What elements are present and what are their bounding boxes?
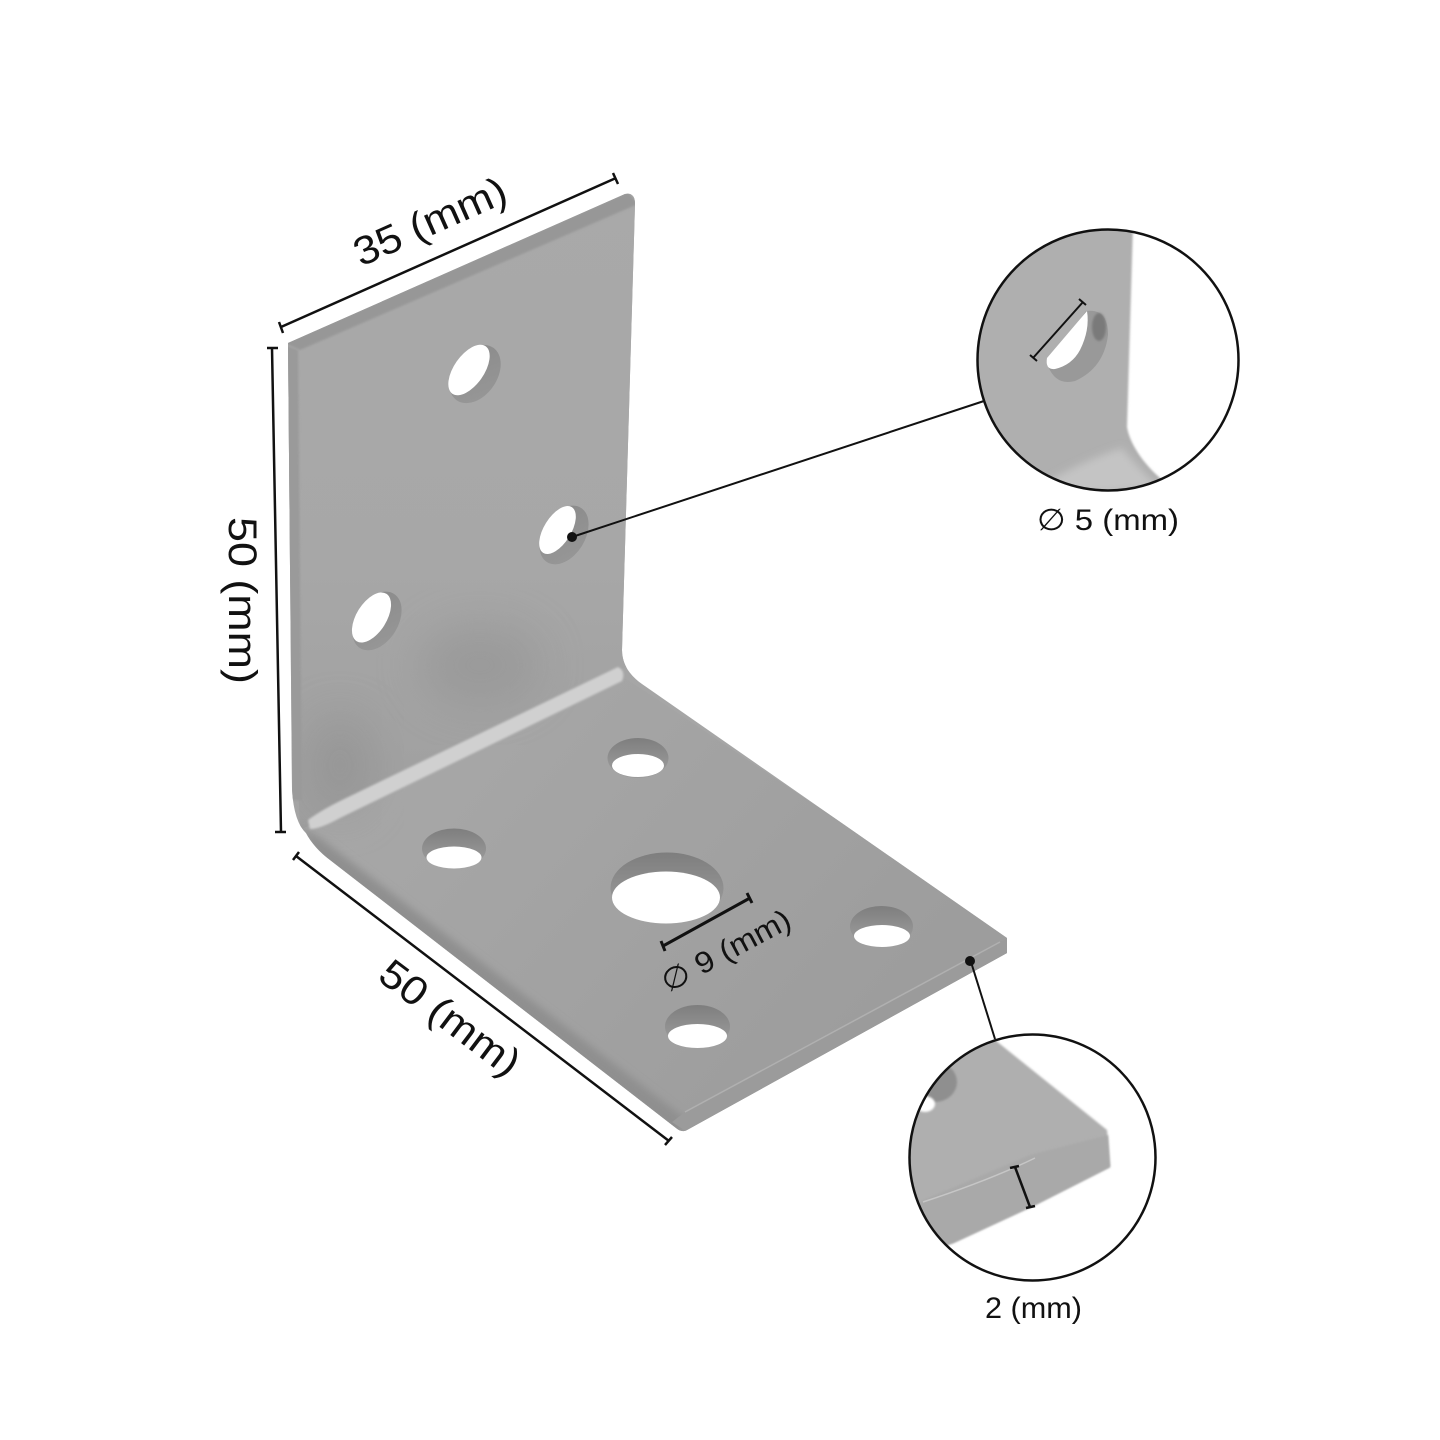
hole 3 bbox=[342, 583, 412, 659]
magnified plate corner bbox=[910, 1041, 1111, 1246]
hole 6 bbox=[850, 906, 913, 947]
hole shadow bbox=[1092, 313, 1106, 341]
large hole bbox=[610, 852, 724, 924]
left edge band bbox=[288, 346, 300, 800]
shadow patch lower left bbox=[324, 742, 356, 784]
dimension: 50 mm bottom bbox=[293, 852, 672, 1145]
edge highlight bbox=[923, 1158, 1035, 1202]
dimension: 35 mm top: 35 (mm) bbox=[347, 169, 514, 275]
bend highlight bbox=[308, 667, 623, 829]
label: 5 mm: ∅ 5 (mm) bbox=[1037, 504, 1179, 537]
bracket photo bbox=[280, 180, 1010, 1140]
callout ring bbox=[910, 1034, 1156, 1280]
top edge band bbox=[285, 192, 638, 350]
hole 7 bbox=[665, 1005, 730, 1048]
shadow patch near bend bbox=[446, 642, 519, 685]
hole 1 bbox=[439, 335, 511, 413]
magnified hole wall bbox=[1048, 311, 1108, 382]
hole 4 bbox=[608, 738, 668, 778]
callout ring bbox=[978, 230, 1238, 490]
dimension: 50 mm left: 50 (mm) bbox=[220, 517, 264, 684]
magnified bend highlight bbox=[1054, 448, 1154, 489]
hole 2 bbox=[529, 497, 599, 573]
leader line: 5 mm bbox=[567, 401, 984, 542]
thickness tick bbox=[1010, 1166, 1035, 1208]
front edge face bbox=[672, 938, 1010, 1132]
front edge highlight bbox=[685, 942, 1000, 1112]
dimension: 35 mm top bbox=[279, 169, 618, 333]
horizontal flange tone bbox=[304, 812, 1007, 1132]
callout: 2 mm thickness bbox=[900, 1030, 1156, 1280]
magnified plate bbox=[978, 230, 1161, 490]
vertical flange tone bbox=[280, 180, 640, 830]
infographic: angle bracket dimensions bbox=[220, 172, 1240, 1324]
lower flange holes bbox=[422, 738, 913, 1048]
leader line: 2 mm bbox=[965, 956, 995, 1039]
dimension: 9 mm hole: ∅ 9 (mm) bbox=[656, 903, 797, 999]
magnified edge face bbox=[946, 1134, 1111, 1246]
callout: 5 mm hole bbox=[970, 225, 1238, 495]
hole dimension tick bbox=[1030, 299, 1086, 361]
magnified hole bbox=[927, 1068, 958, 1102]
dimension: 50 mm bottom: 50 (mm) bbox=[371, 951, 529, 1085]
bracket body bbox=[288, 194, 1007, 1131]
hole opening bbox=[915, 1096, 935, 1112]
lower left edge band bbox=[300, 826, 690, 1135]
dimension: 50 mm left bbox=[220, 348, 286, 832]
label: 2 mm: 2 (mm) bbox=[985, 1292, 1082, 1325]
surface shading bbox=[280, 180, 1010, 1140]
hole opening bbox=[1047, 311, 1088, 369]
hole 5 bbox=[422, 828, 486, 868]
upper flange holes bbox=[342, 335, 599, 659]
